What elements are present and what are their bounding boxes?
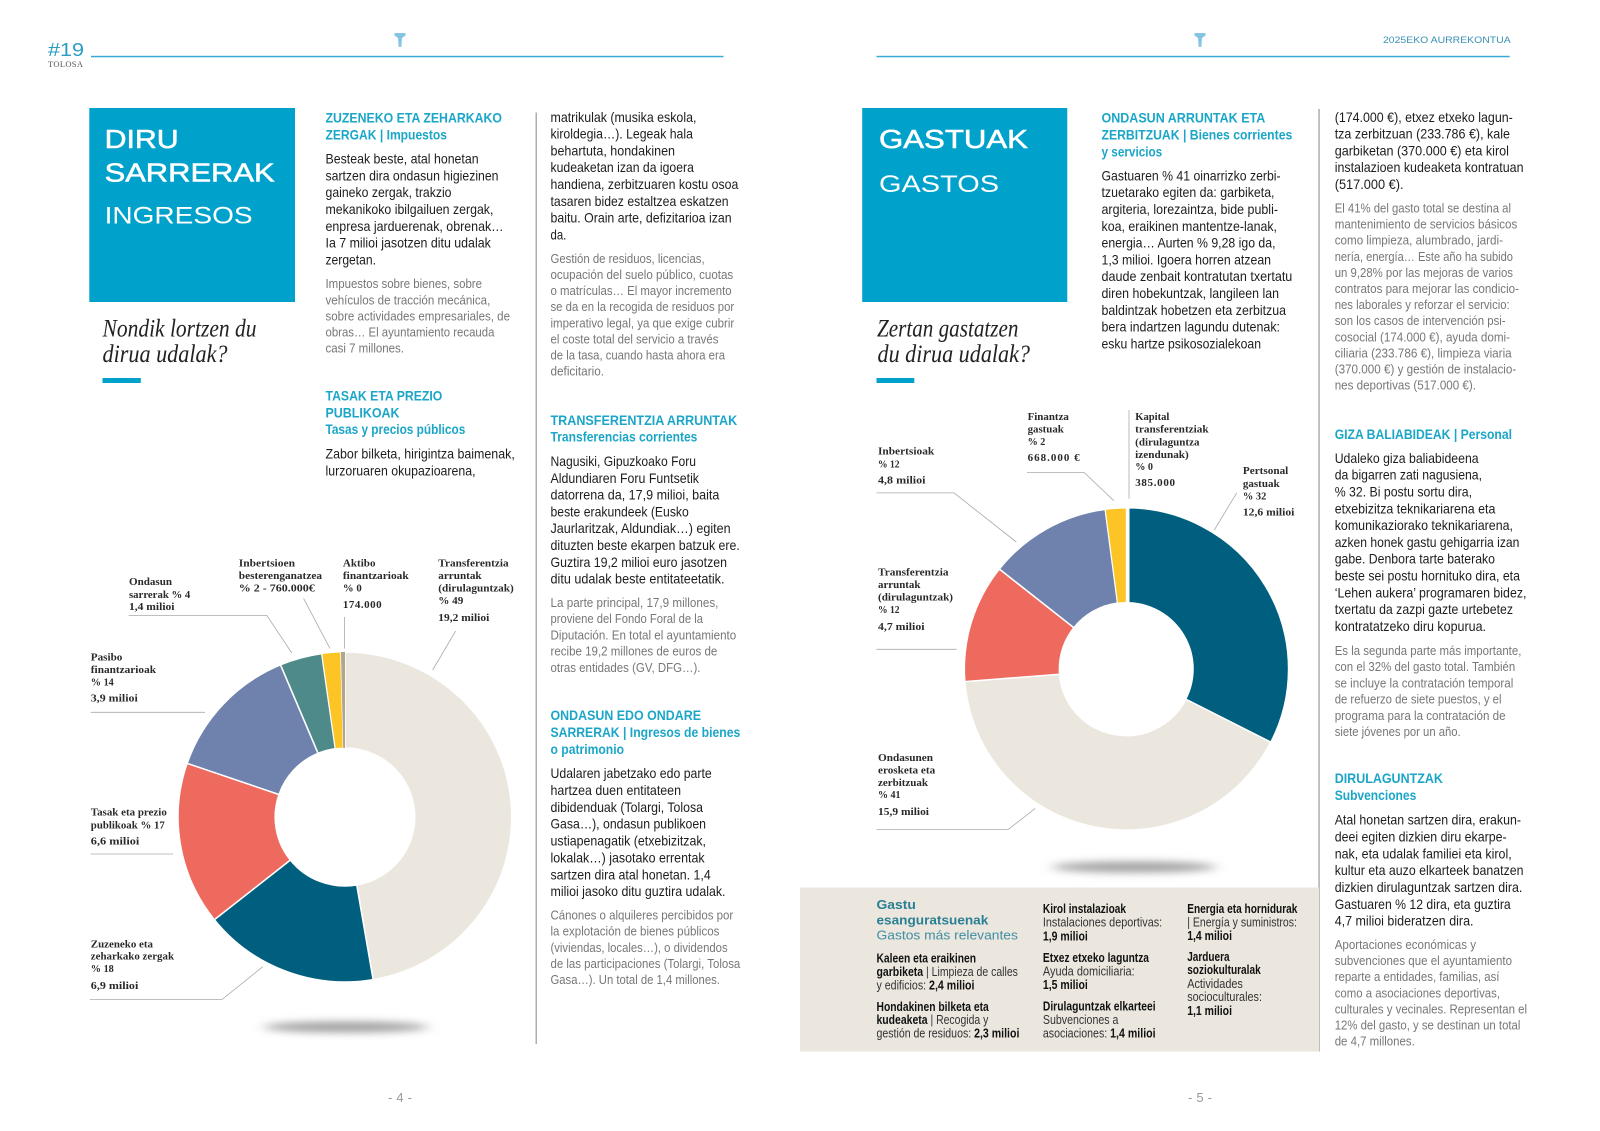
item: hondakinen bilketa <box>876 1000 1019 1040</box>
text block: zuzeneko zergak: gaineko zergak, trakzio <box>326 184 452 200</box>
leader lines <box>876 410 1237 830</box>
label: aktibo finantzarioak: finantzarioak <box>343 570 410 582</box>
text block: giza baliabideak: kontratatzeko diru kopurua. <box>1335 618 1486 634</box>
label: ondasun sarrerak: sarrerak % 4 <box>129 589 191 601</box>
donut chart: expenses <box>876 410 1294 872</box>
label: pasibo finantzarioak: Pasibo <box>91 652 123 664</box>
text block: zuzeneko zergak: sobre actividades empresariales, de <box>326 308 510 323</box>
item: energia eta hornidurak: 1,4 milioi <box>1187 929 1232 943</box>
item: jarduera soziokulturalak: socioculturales: <box>1187 990 1262 1004</box>
text block: matrikulak continuation: handiena, zerbitzuaren kostu osoa <box>550 176 738 192</box>
text block: transferentzia arruntak: datorrena da, 17,9 milioi, baita <box>550 487 720 503</box>
label: ondasun sarrerak: 1,4 milioi <box>129 601 174 613</box>
item: energia eta hornidurak: Energia eta hornidurak <box>1187 902 1297 916</box>
text block: transferentzia arruntak: Aldundiaren Foru Funtsetik <box>550 470 700 486</box>
text block: ondasun edo ondare sarrerak: sartzen dira atal honetan. 1,4 <box>550 866 711 882</box>
text block: ondasun arruntak eta zerbitzuak: argiteria, lorezaintza, bide publi- <box>1102 201 1278 217</box>
text block: matrikulak continuation: da. <box>550 226 566 242</box>
slice: inbertsioen besterenganatzea 2 <box>322 652 343 749</box>
text block: giza baliabideak: da bigarren zati nagusiena, <box>1335 467 1482 483</box>
label: zuzeneko eta zeharkako zergak: % 18 <box>91 963 114 975</box>
text block: zuzeneko zergak: sartzen dira ondasun higiezinen <box>326 167 498 183</box>
text block: bienes continuation: (517.000 €). <box>1335 176 1404 192</box>
label: pertsonal gastuak: gastuak <box>1243 478 1280 490</box>
label: pertsonal gastuak: Pertsonal <box>1243 465 1288 477</box>
text block: transferentzia arruntak: ditu udalak beste entitateetatik. <box>550 571 724 587</box>
text block: matrikulak continuation: de la tasa, cuando hasta ahora era <box>550 348 726 362</box>
label: ondasun sarrerak: Ondasun <box>129 576 172 588</box>
text block: ondasun arruntak eta zerbitzuak: ONDASUN ARRUNTAK ETA <box>1102 110 1265 126</box>
column divider left <box>536 112 537 1044</box>
label: pertsonal gastuak: 12,6 milioi <box>1243 506 1294 518</box>
text block: ondasun arruntak eta zerbitzuak: 1,3 milioi. Igoera horren atzean <box>1102 251 1271 267</box>
label: zuzeneko eta zeharkako zergak: zeharkako zergak <box>91 950 175 962</box>
label: tasak eta prezio: 6,6 milioi <box>91 836 139 848</box>
label: ondasunen erosketa: erosketa eta <box>878 764 936 776</box>
text block: transferentzia arruntak: La parte principal, 17,9 millones, <box>550 595 718 610</box>
label: kapital transferentziak: (dirulaguntza <box>1135 436 1200 448</box>
question heading right: du dirua udalak? <box>878 341 1030 368</box>
text block: zuzeneko zergak <box>326 110 510 356</box>
text block: transferentzia arruntak: dituzten beste ekarpen batzuk ere. <box>550 537 740 553</box>
text block: tasak eta prezio publikoak: PUBLIKOAK <box>326 404 400 420</box>
text block: ondasun edo ondare sarrerak: ustiapenagatik (etxebizitzak, <box>550 833 706 849</box>
text block: giza baliabideak: ‘Lehen aukera’ programaren bidez, <box>1335 584 1526 600</box>
text block: transferentzia arruntak: proviene del Fondo Foral de la <box>550 611 704 626</box>
slice: transferentzia arruntak 49 <box>345 652 512 980</box>
text block: bienes continuation: nes laborales y reforzar el servicio: <box>1335 297 1510 312</box>
slice: aktibo finantzarioak 0 <box>341 652 345 748</box>
label: ondasunen erosketa: zerbitzuak <box>878 777 929 789</box>
text block: giza baliabideak: GIZA BALIABIDEAK | Personal <box>1335 426 1512 442</box>
label: zuzeneko eta zeharkako zergak: Zuzeneko eta <box>91 938 153 950</box>
text block: transferentzia arruntak <box>550 412 740 675</box>
text block: giza baliabideak: txertatu da zazpi gazte urtebetez <box>1335 601 1513 617</box>
accent bar left <box>102 378 141 383</box>
slice: ondasun sarrerak 4 <box>281 654 335 753</box>
text block: transferentzia arruntak: Jaurlaritzak, Aldundiak…) egiten <box>550 520 731 536</box>
text block: bienes continuation: El 41% del gasto total se destina al <box>1335 200 1511 216</box>
text block: giza baliabideak: se incluye la contratación temporal <box>1335 675 1513 690</box>
label: inbertsioen besterenganatzea: % 2 - 760.000€ <box>239 582 315 594</box>
text block: ondasun edo ondare sarrerak: Gasa…), ondasun publikoen <box>550 816 706 832</box>
text block: transferentzia arruntak: recibe 19,2 millones de euros de <box>550 644 717 659</box>
panel heading: esanguratsuenak <box>876 912 989 928</box>
item: kaleen garbiketa: y edificios: 2,4 milioi <box>876 979 974 993</box>
text block: giza baliabideak: gabe. Denbora tarte baterako <box>1335 551 1495 567</box>
label: transferentzia arruntak expense <box>878 566 953 633</box>
donut slices income <box>178 652 512 982</box>
text block: ondasun edo ondare sarrerak: o patrimonio <box>550 741 624 757</box>
label: pasibo finantzarioak: % 14 <box>91 676 114 688</box>
text block: ondasun edo ondare sarrerak: de las participaciones (Tolargi, Tolosa <box>550 956 741 971</box>
label: kapital transferentziak: % 0 <box>1135 461 1153 473</box>
icon: header funnel left <box>394 33 406 47</box>
text block: giza baliabideak: komunikaziorako teknikariarena, <box>1335 517 1513 533</box>
text block: dirulaguntzak: Subvenciones <box>1335 787 1416 803</box>
text block: zuzeneko zergak: vehículos de tracción mecánica, <box>326 292 490 307</box>
text block: matrikulak continuation: Gestión de residuos, licencias, <box>550 251 705 266</box>
label: transferentzia arruntak: Transferentzia <box>438 557 509 569</box>
slice: pertsonal gastuak 32 <box>1129 508 1288 742</box>
text block: dirulaguntzak: de 4,7 millones. <box>1335 1034 1415 1049</box>
header rule right <box>876 56 1510 57</box>
item: jarduera soziokulturalak: Jarduera <box>1187 950 1230 964</box>
label: kapital transferentziak: izendunak) <box>1135 449 1189 461</box>
text block: zuzeneko zergak: Besteak beste, atal honetan <box>326 151 479 167</box>
donut chart: income <box>90 557 514 1032</box>
text block: bienes continuation: un 9,28% por las mejoras de varios <box>1335 265 1513 280</box>
label: ondasunen erosketa: % 41 <box>878 789 900 801</box>
title panel: diru sarrerak: INGRESOS <box>105 203 253 230</box>
text block: zuzeneko zergak: Ia 7 milioi jasotzen ditu udalak <box>326 235 492 251</box>
label: transferentzia arruntak expense: (dirulaguntzak) <box>878 591 953 603</box>
panel heading: Gastos más relevantes <box>876 928 1018 943</box>
text block: ondasun arruntak eta zerbitzuak: bera indartzen lagundu dutenak: <box>1102 319 1280 335</box>
chart shadow <box>264 1022 428 1032</box>
text block: bienes continuation: garbiketan (370.000 €) eta kirol <box>1335 142 1509 158</box>
item: etxez etxeko laguntza: 1,5 milioi <box>1043 978 1088 992</box>
title panel: diru sarrerak: SARRERAK <box>105 159 275 187</box>
text block: bienes continuation: instalazioen kudeaketa kontratuan <box>1335 159 1524 175</box>
header rule left <box>91 56 724 57</box>
label: ondasunen erosketa: Ondasunen <box>878 752 933 764</box>
text block: tasak eta prezio publikoak: Tasas y precios públicos <box>326 421 465 437</box>
text block: matrikulak continuation: behartuta, hondakinen <box>550 142 675 158</box>
question heading left: dirua udalak? <box>102 341 228 368</box>
question heading right: Zertan gastatzen <box>877 316 1018 342</box>
text block: bienes continuation: contratos para mejorar las condicio- <box>1335 281 1519 296</box>
item: hondakinen bilketa: Hondakinen bilketa eta <box>876 1000 990 1014</box>
text block: giza baliabideak: siete jóvenes por un año. <box>1335 724 1461 739</box>
text block: bienes continuation: tza zerbitzuan (233.786 €), kale <box>1335 126 1510 142</box>
item: dirulaguntzak elkarteei: Dirulaguntzak elkarteei <box>1043 999 1156 1013</box>
text block: dirulaguntzak: DIRULAGUNTZAK <box>1335 770 1443 786</box>
text block: giza baliabideak: de refuerzo de siete puestos, y el <box>1335 692 1502 707</box>
text block: dirulaguntzak: culturales y vecinales. Representan el <box>1335 1001 1527 1016</box>
label: ondasun sarrerak <box>129 576 191 613</box>
label: zuzeneko eta zeharkako zergak <box>91 938 175 992</box>
label: pertsonal gastuak: % 32 <box>1243 490 1267 502</box>
item: kaleen garbiketa: Kaleen eta eraikinen <box>876 952 976 966</box>
left page <box>48 33 741 1105</box>
issue number: #19 <box>48 40 84 60</box>
label: finantza gastuak: 668.000 € <box>1028 452 1080 464</box>
label: aktibo finantzarioak: Aktibo <box>343 557 376 569</box>
label: inbertsioak: % 12 <box>878 458 900 470</box>
text block: giza baliabideak: Es la segunda parte más importante, <box>1335 643 1521 658</box>
title panel: diru sarrerak: DIRU <box>105 126 179 154</box>
text block: zuzeneko zergak: zergetan. <box>326 251 376 267</box>
panel heading: Gastu <box>876 897 916 912</box>
label: kapital transferentziak: Kapital <box>1135 411 1169 423</box>
text block: ondasun edo ondare sarrerak: ONDASUN EDO ONDARE <box>550 707 701 723</box>
question heading left: Nondik lortzen du <box>102 316 256 342</box>
running header: 2025EKO AURREKONTUA <box>1383 35 1511 46</box>
text block: zuzeneko zergak: ZUZENEKO ETA ZEHARKAKO <box>326 110 502 126</box>
text block: ondasun arruntak eta zerbitzuak: Gastuaren % 41 oinarrizko zerbi- <box>1102 167 1281 183</box>
text block: ondasun arruntak eta zerbitzuak: energia… Aurten % 9,28 igo da, <box>1102 235 1276 251</box>
text block: giza baliabideak: azken honek gastu gehigarria izan <box>1335 534 1519 550</box>
text block: bienes continuation: ciliaria (233.786 €), limpieza viaria <box>1335 345 1512 360</box>
text block: dirulaguntzak: 12% del gasto, y se destinan un total <box>1335 1018 1520 1032</box>
issue number <box>48 40 84 69</box>
text block: transferentzia arruntak: TRANSFERENTZIA ARRUNTAK <box>550 412 737 428</box>
label: kapital transferentziak <box>1135 411 1210 489</box>
text block: tasak eta prezio publikoak: TASAK ETA PREZIO <box>326 388 442 404</box>
label: zuzeneko eta zeharkako zergak: 6,9 milioi <box>91 980 138 992</box>
text block: dirulaguntzak: kultur eta auzo elkarteek banatzen <box>1335 862 1524 878</box>
icon: header funnel right <box>1194 33 1206 47</box>
text block: transferentzia arruntak: Guztira 19,2 milioi euro jasotzen <box>550 554 727 570</box>
label: finantza gastuak: % 2 <box>1028 436 1046 448</box>
text block: dirulaguntzak: subvenciones que el ayuntamiento <box>1335 953 1512 968</box>
text block: ondasun arruntak eta zerbitzuak: daude zenbait kontratutan txertatu <box>1102 268 1292 284</box>
text block: giza baliabideak: beste sei postu hornituko dira, eta <box>1335 568 1520 584</box>
text block: matrikulak continuation: se da en la recogida de residuos por <box>550 299 735 314</box>
slice: tasak 17 <box>178 763 290 920</box>
text block: bienes continuation: (174.000 €), etxez etxeko lagun- <box>1335 109 1513 125</box>
slice: pasibo finantzarioak 14 <box>187 665 318 794</box>
item: dirulaguntzak elkarteei: Subvenciones a <box>1043 1013 1118 1027</box>
text block: transferentzia arruntak: otras entidades (GV, DFG…). <box>550 660 700 675</box>
text block: ondasun edo ondare sarrerak: lokalak…) jasotako errentak <box>550 849 705 865</box>
item: etxez etxeko laguntza <box>1043 951 1150 992</box>
text block: bienes continuation: cosocial (174.000 €), ayuda domi- <box>1335 329 1510 344</box>
text block: giza baliabideak: Udaleko giza baliabideena <box>1335 450 1479 466</box>
label: transferentzia arruntak expense: % 12 <box>878 604 900 616</box>
text block: bienes continuation: mantenimiento de servicios básicos <box>1335 217 1518 232</box>
text block: ondasun arruntak eta zerbitzuak: y servicios <box>1102 143 1162 159</box>
text block: matrikulak continuation: el coste total del servicio a través <box>550 331 719 346</box>
label: transferentzia arruntak: 19,2 milioi <box>438 612 489 624</box>
title panel: diru sarrerak <box>89 108 295 302</box>
label: finantza gastuak: gastuak <box>1028 424 1065 436</box>
item: hondakinen bilketa: kudeaketa | Recogida y <box>876 1013 989 1027</box>
text block: matrikulak continuation: o matrículas… El mayor incremento <box>550 283 732 298</box>
text block: transferentzia arruntak: Transferencias corrientes <box>550 429 698 445</box>
text block: zuzeneko zergak: ZERGAK | Impuestos <box>326 127 447 143</box>
text block: matrikulak continuation: imperativo legal, ya que exige cubrir <box>550 315 735 330</box>
text block: transferentzia arruntak: Nagusiki, Gipuzkoako Foru <box>550 453 696 469</box>
text block: dirulaguntzak: reparte a entidades, familias, así <box>1335 969 1500 984</box>
slice: ondasunen erosketa 41 <box>965 674 1271 830</box>
item: hondakinen bilketa: gestión de residuos: 2,3 milioi <box>876 1026 1019 1040</box>
text block: dirulaguntzak <box>1335 770 1527 1049</box>
text block: matrikulak continuation: tasaren bidez estaltzea eskatzen <box>550 193 729 209</box>
item: jarduera soziokulturalak: Actividades <box>1187 977 1243 991</box>
text block: ondasun arruntak eta zerbitzuak <box>1102 110 1292 351</box>
label: tasak eta prezio <box>91 806 167 848</box>
label: transferentzia arruntak expense: Transferentzia <box>878 566 949 578</box>
label: inbertsioak: 4,8 milioi <box>878 475 926 487</box>
item: kirol instalazioak: Kirol instalazioak <box>1043 902 1126 916</box>
text block: bienes continuation: como limpieza, alumbrado, jardi- <box>1335 233 1503 248</box>
label: transferentzia arruntak expense: arruntak <box>878 579 921 591</box>
text block: giza baliabideak <box>1335 426 1526 739</box>
item: jarduera soziokulturalak: soziokulturalak <box>1187 963 1261 977</box>
text block: zuzeneko zergak: mekanikoko ibilgailuen zergak, <box>326 201 493 217</box>
item: jarduera soziokulturalak: 1,1 milioi <box>1187 1004 1232 1018</box>
text block: zuzeneko zergak: casi 7 millones. <box>326 341 404 356</box>
text block: ondasun arruntak eta zerbitzuak: tzuetarako egiten da: garbiketa, <box>1102 184 1274 200</box>
text block: tasak eta prezio publikoak: lurzoruaren okupazioarena, <box>326 463 476 479</box>
text block: bienes continuation <box>1335 109 1524 393</box>
text block: bienes continuation: (370.000 €) y gestión de instalacio- <box>1335 362 1516 376</box>
label: kapital transferentziak: 385.000 <box>1135 477 1176 489</box>
text block: tasak eta prezio publikoak: Zabor bilketa, hirigintza baimenak, <box>326 446 515 462</box>
label: ondasunen erosketa <box>878 752 936 818</box>
label: kapital transferentziak: transferentziak <box>1135 424 1210 436</box>
text block: zuzeneko zergak: enpresa jarduerenak, obrenak… <box>326 218 504 234</box>
text block: ondasun edo ondare sarrerak: la explotación de bienes públicos <box>550 924 720 939</box>
text block: ondasun edo ondare sarrerak: dibidenduak (Tolargi, Tolosa <box>550 799 703 815</box>
item: kaleen garbiketa: garbiketa | Limpieza de calles <box>876 965 1018 979</box>
label: aktibo finantzarioak: % 0 <box>343 582 362 594</box>
title panel: gastuak: GASTUAK <box>879 126 1028 154</box>
title panel: gastuak: GASTOS <box>879 171 999 198</box>
text block: matrikulak continuation: kudeaketan izan da igoera <box>550 159 694 175</box>
text block: zuzeneko zergak: obras… El ayuntamiento recauda <box>326 324 495 340</box>
text block: transferentzia arruntak: Diputación. En total el ayuntamiento <box>550 627 736 642</box>
text block: ondasun arruntak eta zerbitzuak: esku hartze psikosozialekoan <box>1102 335 1261 351</box>
label: inbertsioen besterenganatzea: besterenganatzea <box>239 570 323 582</box>
issue number: TOLOSA <box>48 59 84 69</box>
item: kirol instalazioak: Instalaciones deportivas: <box>1043 915 1162 929</box>
label: pasibo finantzarioak: 3,9 milioi <box>91 693 138 705</box>
text block: matrikulak continuation: kiroldegia…). Legeak hala <box>550 126 693 142</box>
item: etxez etxeko laguntza: Ayuda domiciliaria: <box>1043 965 1135 979</box>
text block: ondasun arruntak eta zerbitzuak: baldintzak hobetzen eta zerbitzua <box>1102 302 1286 318</box>
text block: ondasun edo ondare sarrerak: Cánones o alquileres percibidos por <box>550 908 734 923</box>
item: energia eta hornidurak: | Energía y suministros: <box>1187 915 1297 929</box>
item: energia eta hornidurak <box>1187 902 1297 943</box>
text block: dirulaguntzak: 4,7 milioi bideratzen dira. <box>1335 913 1474 929</box>
text block: giza baliabideak: etxebizitza teknikariarena eta <box>1335 500 1496 516</box>
text block: ondasun arruntak eta zerbitzuak: ZERBITZUAK | Bienes corrientes <box>1102 127 1292 143</box>
label: transferentzia arruntak expense: 4,7 milioi <box>878 621 924 633</box>
text block: giza baliabideak: % 32. Bi postu sortu dira, <box>1335 484 1472 500</box>
label: finantza gastuak <box>1028 411 1080 464</box>
label: transferentzia arruntak <box>438 557 514 624</box>
text block: dirulaguntzak: deei egiten dizkien diru ekarpe- <box>1335 828 1507 844</box>
item: jarduera soziokulturalak <box>1187 950 1262 1018</box>
chart shadow <box>1052 862 1216 872</box>
leader lines <box>90 598 456 1000</box>
item: kaleen garbiketa <box>876 952 1018 993</box>
text block: bienes continuation: nes deportivas (517.000 €). <box>1335 378 1476 393</box>
text block: zuzeneko zergak: Impuestos sobre bienes, sobre <box>326 276 482 291</box>
text block: dirulaguntzak: Atal honetan sartzen dira, erakun- <box>1335 812 1521 828</box>
label: inbertsioen besterenganatzea: Inbertsioen <box>239 557 295 569</box>
label: inbertsioak: Inbertsioak <box>878 446 935 458</box>
slice: transferentzia arruntak 12 <box>964 569 1074 682</box>
title panel: gastuak <box>862 108 1067 302</box>
text block: matrikulak continuation: matrikulak (musika eskola, <box>550 109 696 125</box>
text block: ondasun edo ondare sarrerak <box>550 707 741 987</box>
text block: ondasun edo ondare sarrerak: Gasa…). Un total de 1,4 millones. <box>550 972 720 987</box>
item: kirol instalazioak <box>1043 902 1162 943</box>
label: pasibo finantzarioak: finantzarioak <box>91 664 157 676</box>
page number left: - 4 - <box>388 1090 412 1105</box>
text block: ondasun edo ondare sarrerak: (viviendas, locales…), o dividendos <box>550 940 728 955</box>
item: kirol instalazioak: 1,9 milioi <box>1043 929 1088 943</box>
text block: dirulaguntzak: nak, eta udalak familiei eta kirol, <box>1335 845 1512 861</box>
accent bar right <box>876 378 914 383</box>
label: transferentzia arruntak: arruntak <box>438 570 482 582</box>
question heading right <box>877 316 1030 368</box>
column divider right <box>1318 109 1320 1052</box>
text block: matrikulak continuation <box>550 109 738 379</box>
text block: matrikulak continuation: ocupación del suelo público, cuotas <box>550 267 734 282</box>
label: tasak eta prezio: Tasak eta prezio <box>91 806 167 818</box>
text block: tasak eta prezio publikoak <box>326 388 515 479</box>
text block: giza baliabideak: con el 32% del gasto total. También <box>1335 659 1515 674</box>
panel: gastu esanguratsuenak <box>800 888 1319 1052</box>
page number right: - 5 - <box>1188 1090 1212 1105</box>
text block: ondasun arruntak eta zerbitzuak: koa, eraikinen mantentze-lanak, <box>1102 218 1277 234</box>
item: etxez etxeko laguntza: Etxez etxeko laguntza <box>1043 951 1150 965</box>
text block: ondasun edo ondare sarrerak: Udalaren jabetzako edo parte <box>550 765 712 781</box>
text block: dirulaguntzak: como a asociaciones deportivas, <box>1335 985 1500 1000</box>
panel heading <box>876 897 1018 943</box>
right page <box>800 33 1527 1105</box>
text block: transferentzia arruntak: beste erakundeek (Eusko <box>550 503 689 519</box>
item: dirulaguntzak elkarteei <box>1043 999 1156 1040</box>
label: transferentzia arruntak: (dirulaguntzak) <box>438 583 514 595</box>
text block: ondasun arruntak eta zerbitzuak: diren hobekuntzak, langileen lan <box>1102 285 1279 301</box>
donut slices expenses <box>964 508 1288 830</box>
label: tasak eta prezio: publikoak % 17 <box>91 819 165 831</box>
label: inbertsioen besterenganatzea <box>239 557 323 594</box>
slice: inbertsioak 12 <box>999 509 1118 628</box>
text block: matrikulak continuation: baitu. Orain arte, defizitarioa izan <box>550 210 732 226</box>
item: dirulaguntzak elkarteei: asociaciones: 1,4 milioi <box>1043 1026 1156 1040</box>
question heading left <box>102 316 256 368</box>
label: aktibo finantzarioak <box>343 557 410 611</box>
label: ondasunen erosketa: 15,9 milioi <box>878 806 929 818</box>
text block: dirulaguntzak: dizkien dirulaguntzak sartzen dira. <box>1335 879 1522 895</box>
label: inbertsioak <box>878 446 935 487</box>
slice: finantza gastuak 2 <box>1105 508 1126 603</box>
label: transferentzia arruntak: % 49 <box>438 595 464 607</box>
label: finantza gastuak: Finantza <box>1028 411 1069 423</box>
text block: ondasun edo ondare sarrerak: hartzea duen entitateen <box>550 782 681 798</box>
text block: ondasun edo ondare sarrerak: SARRERAK | Ingresos de bienes <box>550 724 740 740</box>
label: pasibo finantzarioak <box>91 652 157 705</box>
label: pertsonal gastuak <box>1243 465 1294 518</box>
text block: bienes continuation: son los casos de intervención psi- <box>1335 313 1506 328</box>
text block: dirulaguntzak: Aportaciones económicas y <box>1335 937 1476 952</box>
slice: zuzeneko zergak 18 <box>214 860 373 982</box>
text block: giza baliabideak: programa para la contratación de <box>1335 708 1506 723</box>
text block: bienes continuation: nería, energía… Este año ha subido <box>1335 249 1513 264</box>
text block: ondasun edo ondare sarrerak: milioi jasoko ditu guztira udalak. <box>550 883 726 899</box>
text block: dirulaguntzak: Gastuaren % 12 dira, eta guztira <box>1335 896 1511 912</box>
text block: matrikulak continuation: deficitario. <box>550 364 604 379</box>
label: aktibo finantzarioak: 174.000 <box>343 599 382 611</box>
